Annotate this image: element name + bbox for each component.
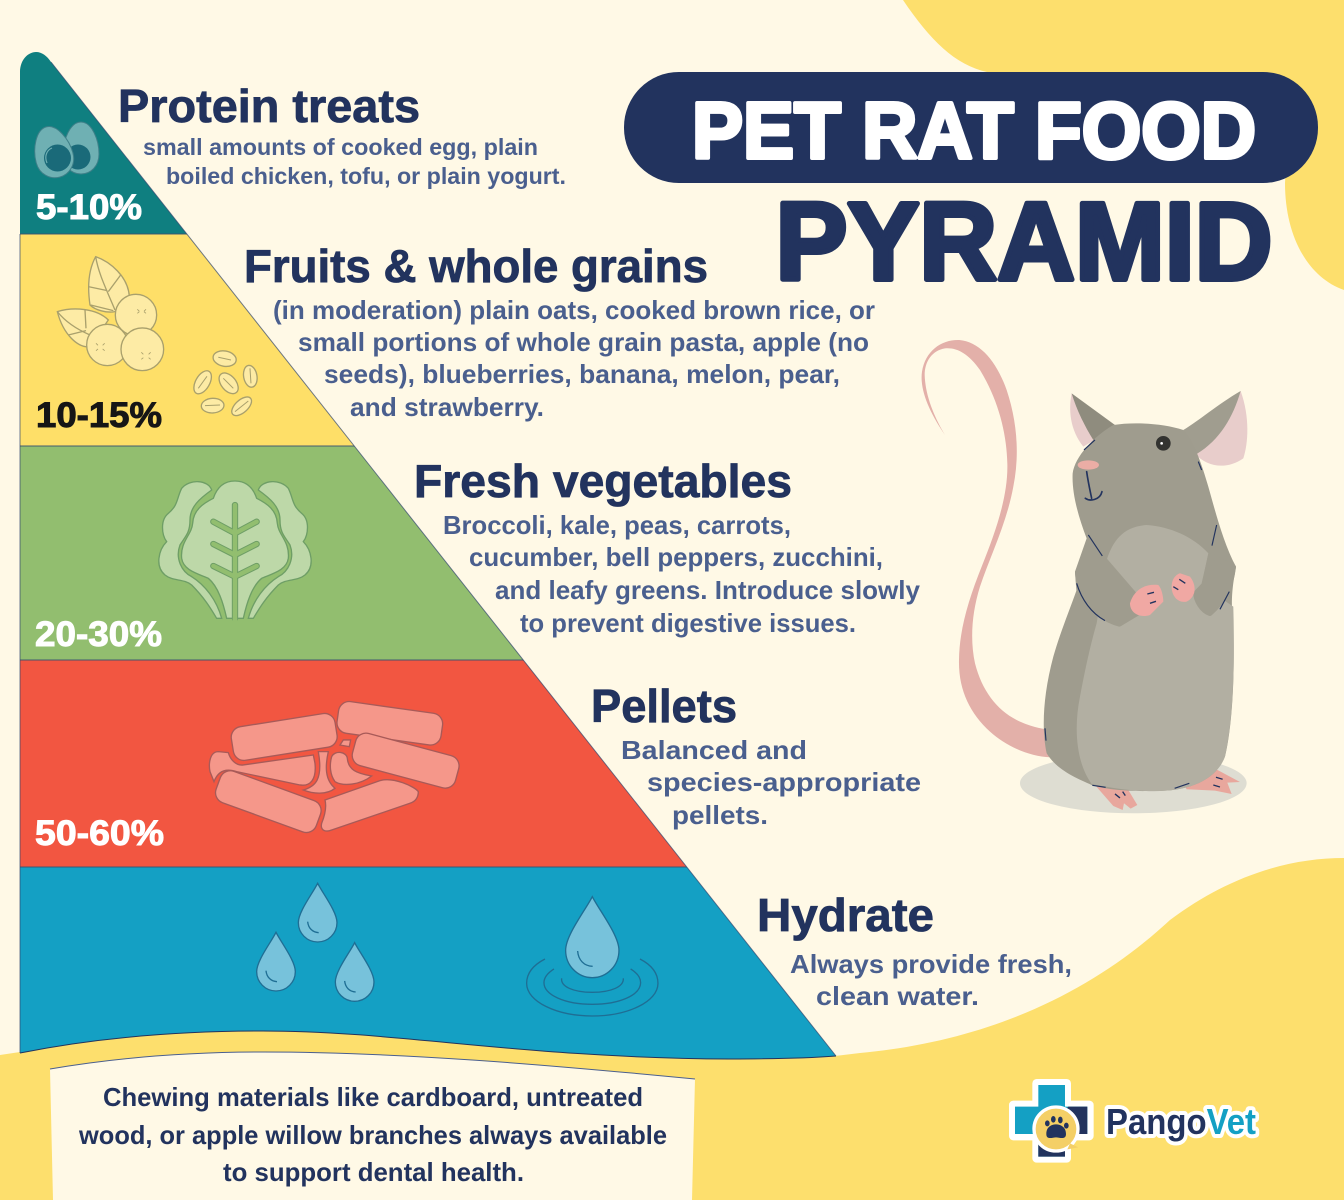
note text: to support dental health. xyxy=(223,1157,524,1187)
icon: lettuce xyxy=(159,481,311,620)
foot left xyxy=(1095,785,1137,810)
band: protein treats xyxy=(20,52,187,234)
bottom wave xyxy=(20,1031,836,1075)
background blob: bottom xyxy=(0,858,1344,1200)
icon: drop with ripples xyxy=(527,897,658,1016)
background blob: top right xyxy=(903,0,1344,290)
drop xyxy=(335,943,374,1001)
arm right xyxy=(1196,556,1233,613)
icon: oats xyxy=(190,349,259,419)
tail xyxy=(922,340,1050,757)
section: vegetables text: to prevent digestive issues. xyxy=(520,608,856,638)
section: fruits and grains text: Fruits & whole grains xyxy=(244,240,708,292)
note text: Chewing materials like cardboard, untreated xyxy=(103,1082,643,1112)
icon: water drops xyxy=(257,883,374,1001)
arm left xyxy=(1078,547,1138,624)
band: water xyxy=(20,867,850,1062)
mouth xyxy=(1085,472,1102,500)
section: fruits and grains text: (in moderation) plain oats, cooked brown rice, or xyxy=(273,295,875,325)
title line 1: PET RAT FOOD xyxy=(692,86,1256,175)
outline details xyxy=(1045,440,1229,788)
foot right xyxy=(1183,769,1240,794)
nose xyxy=(1078,460,1099,470)
band: vegetables xyxy=(20,446,523,660)
ear right xyxy=(1195,391,1247,466)
section: pellets text: pellets. xyxy=(672,800,768,830)
icon: pellets xyxy=(209,700,461,836)
icon: eggs xyxy=(28,122,99,182)
section: vegetables text: Fresh vegetables xyxy=(414,455,792,507)
title line 2: PYRAMID xyxy=(776,180,1272,304)
title pill xyxy=(624,72,1318,183)
band: pellets xyxy=(20,660,686,867)
shadow xyxy=(1020,753,1247,813)
section: protein treats text: Protein treats xyxy=(118,80,420,132)
section: pellets text xyxy=(591,680,921,830)
section: fruits and grains text xyxy=(244,240,875,422)
section: protein treats text: small amounts of cooked egg, plain xyxy=(143,134,538,160)
section: vegetables text: cucumber, bell peppers, zucchini, xyxy=(469,542,883,572)
eye xyxy=(1156,436,1171,451)
percent: 5-10%: 5-10% xyxy=(36,188,142,227)
section: fruits and grains text: seeds), blueberries, banana, melon, pear, xyxy=(324,359,840,389)
section: fruits and grains text: small portions of whole grain pasta, apple (no xyxy=(298,327,869,357)
section: vegetables text: and leafy greens. Introduce slowly xyxy=(495,575,921,605)
logo icon xyxy=(1013,1083,1089,1158)
section: hydrate text: Hydrate xyxy=(757,889,934,941)
section: hydrate text xyxy=(757,889,1072,1011)
percent: 20-30%: 20-30% xyxy=(35,615,162,654)
section: pellets text: Balanced and xyxy=(621,735,807,765)
belly xyxy=(1077,525,1234,791)
section: vegetables text: Broccoli, kale, peas, carrots, xyxy=(443,510,791,540)
drop xyxy=(257,932,295,991)
body xyxy=(1044,423,1236,791)
ear left xyxy=(1070,393,1100,447)
section: protein treats text xyxy=(118,80,566,189)
section: hydrate text: clean water. xyxy=(816,981,979,1011)
hand right xyxy=(1172,573,1195,602)
section: protein treats text: boiled chicken, tofu, or plain yogurt. xyxy=(166,163,566,189)
note text xyxy=(78,1082,667,1187)
percent: 50-60%: 50-60% xyxy=(35,814,164,853)
section: vegetables text xyxy=(414,455,921,638)
percent: 10-15%: 10-15% xyxy=(36,396,162,435)
band: fruits and grains xyxy=(20,234,354,446)
icon: fruit and leaves xyxy=(57,257,164,371)
section: hydrate text: Always provide fresh, xyxy=(790,949,1072,979)
drop xyxy=(298,883,337,942)
logo: PangoVet xyxy=(1013,1083,1256,1158)
pyramid xyxy=(20,50,850,1062)
section: pellets text: species-appropriate xyxy=(647,767,921,797)
note text: wood, or apple willow branches always available xyxy=(78,1120,667,1150)
title xyxy=(624,72,1318,304)
logo text: PangoVet xyxy=(1106,1101,1256,1142)
section: fruits and grains text: and strawberry. xyxy=(350,392,544,422)
illustration: rat xyxy=(922,340,1247,813)
note panel xyxy=(50,1052,695,1200)
section: pellets text: Pellets xyxy=(591,680,737,732)
hand left xyxy=(1130,585,1163,616)
